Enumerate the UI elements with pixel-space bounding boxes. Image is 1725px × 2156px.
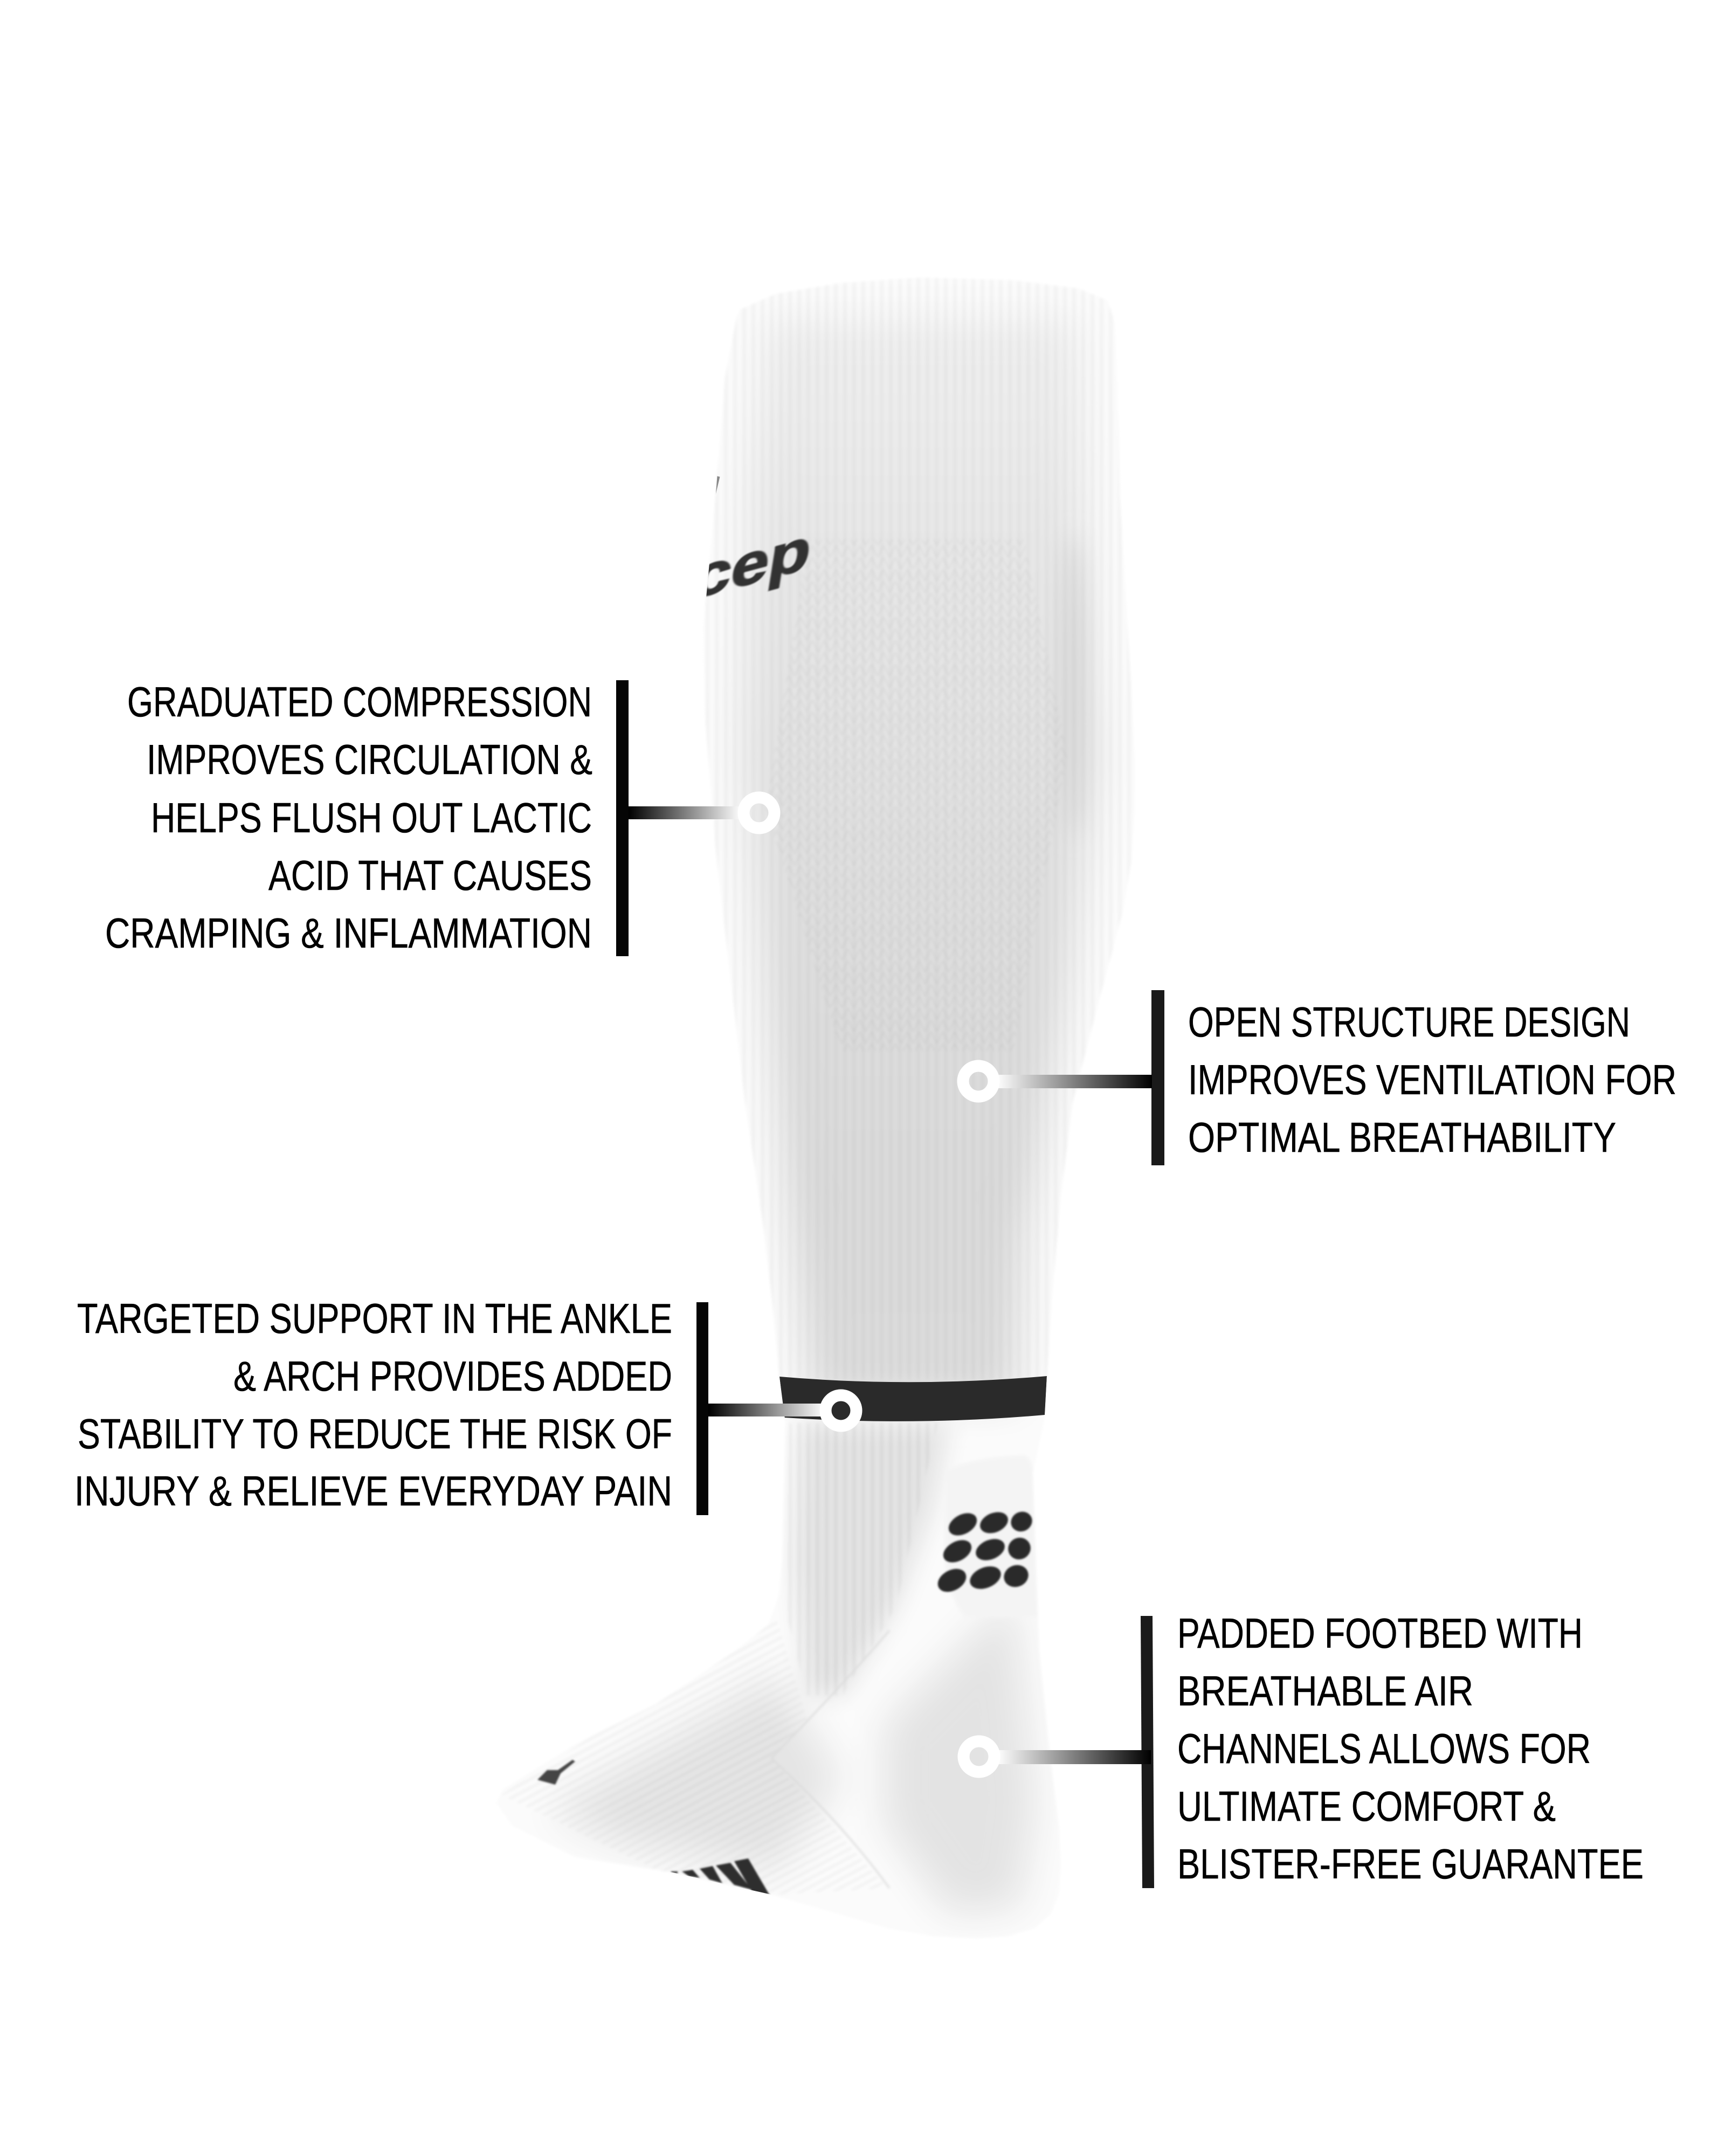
callout text block: CRAMPING & INFLAMMATION — [105, 909, 592, 957]
connector — [997, 1750, 1151, 1764]
cep logo on calf: cep — [689, 515, 816, 612]
marker ring — [963, 1066, 994, 1096]
connector — [708, 1404, 825, 1416]
callout text block: CHANNELS ALLOWS FOR — [1177, 1725, 1591, 1772]
callout: graduated compression — [105, 678, 774, 957]
callout text block: PADDED FOOTBED WITH — [1177, 1609, 1583, 1657]
callout: targeted support — [74, 1295, 856, 1515]
connector — [996, 1075, 1152, 1088]
infographic canvas — [78, 279, 1675, 1929]
marker ring — [964, 1741, 994, 1772]
callout text block: IMPROVES CIRCULATION & — [147, 736, 592, 783]
vertical bar — [1141, 1616, 1154, 1888]
sole logo fragment — [671, 1858, 771, 1897]
callout text block: TARGETED SUPPORT IN THE ANKLE — [77, 1295, 672, 1342]
callout text block: ACID THAT CAUSES — [268, 852, 592, 899]
marker ring — [826, 1395, 856, 1426]
toe mark — [537, 1760, 575, 1785]
sock photo illustration — [508, 279, 1131, 1929]
logo edge stroke — [713, 476, 719, 501]
callout text block: BREATHABLE AIR — [1177, 1667, 1473, 1715]
dot grid logo — [934, 1508, 1036, 1597]
callout text block: GRADUATED COMPRESSION — [127, 678, 592, 725]
callout text block — [74, 1295, 672, 1515]
vertical bar — [616, 680, 629, 956]
marker ring — [744, 798, 774, 828]
callout text block — [1177, 1609, 1644, 1888]
connector — [629, 806, 742, 819]
callout text block: INJURY & RELIEVE EVERYDAY PAIN — [74, 1467, 672, 1515]
ankle ribbed section — [787, 1423, 949, 1696]
vertical bar — [1151, 990, 1164, 1165]
callout text block: ULTIMATE COMFORT & — [1177, 1782, 1556, 1830]
callout: padded footbed — [964, 1609, 1644, 1888]
callout text block: STABILITY TO REDUCE THE RISK OF — [78, 1410, 672, 1457]
callout text block: OPTIMAL BREATHABILITY — [1188, 1114, 1616, 1161]
heel panel — [944, 1455, 1038, 1617]
callout text block: HELPS FLUSH OUT LACTIC — [151, 794, 592, 841]
foot and toe section — [501, 1595, 1035, 1913]
vertical bar — [696, 1302, 708, 1515]
leg shading — [724, 301, 1121, 1382]
foot seam — [771, 1630, 889, 1888]
callout text block: & ARCH PROVIDES ADDED — [233, 1352, 672, 1400]
callout: open structure design — [963, 990, 1676, 1165]
callout text block — [1188, 998, 1676, 1161]
ankle band — [779, 1376, 1047, 1421]
callout text block — [105, 678, 592, 957]
